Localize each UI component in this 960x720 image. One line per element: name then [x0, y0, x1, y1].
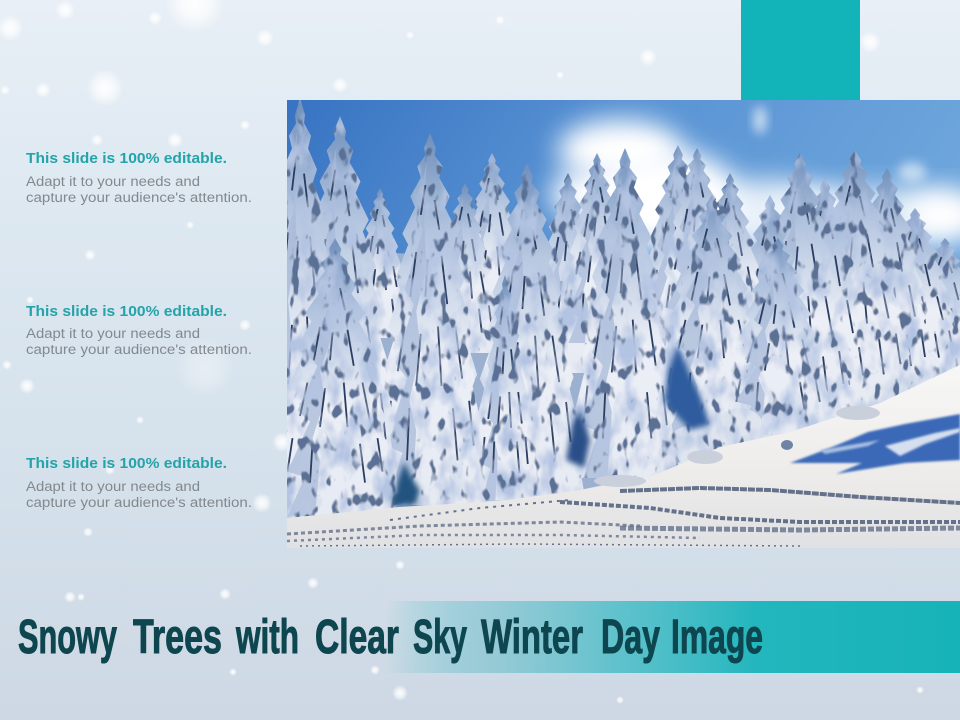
teal accent block: [741, 0, 860, 100]
text block 3: Adapt it to your needs and: [26, 479, 200, 494]
title: with: [235, 611, 299, 664]
title: Sky: [413, 611, 467, 664]
photo: snowy trees under a clear sky: [250, 98, 960, 548]
text block 2: Adapt it to your needs and: [26, 326, 200, 341]
text block 1: Adapt it to your needs and: [26, 174, 200, 189]
title: Image: [671, 611, 763, 664]
text block 2: This slide is 100% editable.: [26, 303, 227, 320]
title: Snowy: [18, 611, 117, 664]
clouds: [550, 106, 960, 250]
text block 1: [26, 150, 252, 205]
text block 1: capture your audience's attention.: [26, 190, 252, 205]
snow-laden forest backing: [380, 253, 772, 508]
ski tracks: [287, 488, 960, 546]
snowy slope: [287, 365, 960, 548]
title: Winter: [481, 611, 583, 664]
spruce tree mass: [250, 98, 960, 518]
snow mounds: [594, 406, 880, 487]
title: [18, 611, 763, 664]
text block 3: capture your audience's attention.: [26, 495, 252, 510]
tree shadow on snow: [790, 414, 960, 474]
title: Day: [601, 611, 660, 664]
text block 2: capture your audience's attention.: [26, 342, 252, 357]
dark shaded hollows between trees: [392, 345, 710, 505]
text block 2: [26, 303, 252, 357]
sky: [287, 100, 960, 268]
title banner: [385, 601, 960, 673]
text block 3: This slide is 100% editable.: [26, 455, 227, 472]
text block 3: [26, 455, 252, 510]
title: Trees: [133, 611, 222, 664]
title: Clear: [315, 611, 399, 664]
text block 1: This slide is 100% editable.: [26, 150, 227, 167]
